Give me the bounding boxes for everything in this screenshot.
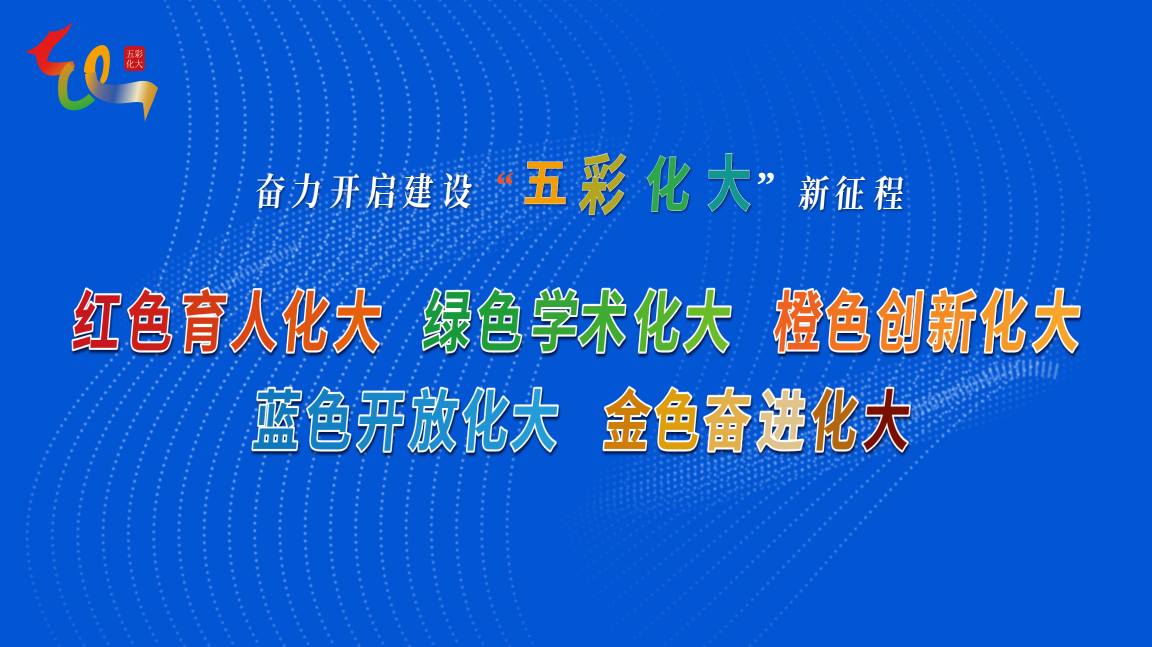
heading quote: close: ” xyxy=(756,165,776,207)
logo: red ribbon xyxy=(25,22,75,76)
slogan: green: 化 xyxy=(630,288,683,360)
heading text: left part: 奋 xyxy=(253,162,288,216)
heading text: left part: 设 xyxy=(440,162,475,216)
logo: blue and gold ribbon xyxy=(85,72,158,122)
slogan: orange: 化 xyxy=(976,288,1029,360)
heading text: left part: 启 xyxy=(365,162,400,216)
slogan: gold xyxy=(600,387,913,459)
heading quote: open: “ xyxy=(496,165,514,207)
slogans row one xyxy=(70,288,1083,360)
heading text: right part xyxy=(797,166,906,217)
slogan: blue: 色 xyxy=(302,387,355,459)
slogan: orange: 色 xyxy=(821,288,874,360)
background: dense dot band, upper xyxy=(124,133,628,335)
slogan: blue: 化 xyxy=(458,387,511,459)
heading highlight: five colours xyxy=(523,134,751,228)
slogan: orange: 橙 xyxy=(771,288,825,360)
heading highlight: five colours: 彩 xyxy=(576,134,631,228)
slogan: green: 术 xyxy=(576,288,629,360)
heading: line one xyxy=(253,134,906,228)
slogan: blue: 蓝 xyxy=(250,387,303,459)
logo: seal xyxy=(124,46,145,71)
heading text: right part: 程 xyxy=(872,166,906,217)
slogan: green: 色 xyxy=(473,288,526,360)
heading highlight: five colours: 大 xyxy=(707,136,751,224)
heading highlight: five colours: 化 xyxy=(643,139,694,224)
slogan: gold: 化 xyxy=(807,387,860,459)
slogan: red: 大 xyxy=(331,288,384,360)
slogan: green: 绿 xyxy=(420,288,474,360)
slogan: gold: 奋 xyxy=(700,387,753,459)
heading text: left part: 建 xyxy=(401,162,436,216)
slogan: orange xyxy=(771,288,1083,360)
heading text: left part xyxy=(253,162,475,216)
logo: green ribbon xyxy=(63,66,92,106)
background: dotted wave, left and upper family xyxy=(27,0,715,647)
slogan: green xyxy=(420,288,734,360)
background: dotted wave, right family xyxy=(580,5,1091,647)
heading text: left part: 力 xyxy=(290,162,325,216)
slogan: red: 育 xyxy=(176,288,229,360)
slogan: red: 人 xyxy=(228,288,281,360)
slogan: blue: 大 xyxy=(508,387,561,459)
slogan: blue xyxy=(250,387,561,459)
slogan: gold: 金 xyxy=(600,387,653,459)
background: bright fold streaks xyxy=(205,245,1060,418)
heading highlight: five colours: 五 xyxy=(523,142,567,216)
heading text: right part: 征 xyxy=(833,166,867,217)
slogan: red: 化 xyxy=(278,288,331,360)
slogan: green: 大 xyxy=(681,288,734,360)
slogan: green: 学 xyxy=(528,288,581,360)
slogan: orange: 大 xyxy=(1030,288,1083,360)
slogan: gold: 进 xyxy=(755,387,808,459)
slogan: blue: 开 xyxy=(354,387,407,459)
heading text: left part: 开 xyxy=(328,162,363,216)
slogan: red xyxy=(70,288,384,360)
slogan: gold: 大 xyxy=(860,387,913,459)
heading text: right part: 新 xyxy=(797,166,831,217)
logo: seal: 化大 xyxy=(126,58,143,70)
slogan: gold: 色 xyxy=(650,387,703,459)
slogan: orange: 创 xyxy=(873,288,926,360)
logo: five-colour ribbon with seal xyxy=(25,22,158,122)
background: dense dot band, lower xyxy=(593,336,1078,515)
logo: orange loop xyxy=(84,45,110,84)
slogan: orange: 新 xyxy=(925,288,978,360)
logo: seal: 五彩 xyxy=(126,48,143,60)
slogans row two xyxy=(250,387,913,459)
slogan: red: 红 xyxy=(70,288,123,360)
slogan: red: 色 xyxy=(123,288,176,360)
slogan: blue: 放 xyxy=(407,387,460,459)
